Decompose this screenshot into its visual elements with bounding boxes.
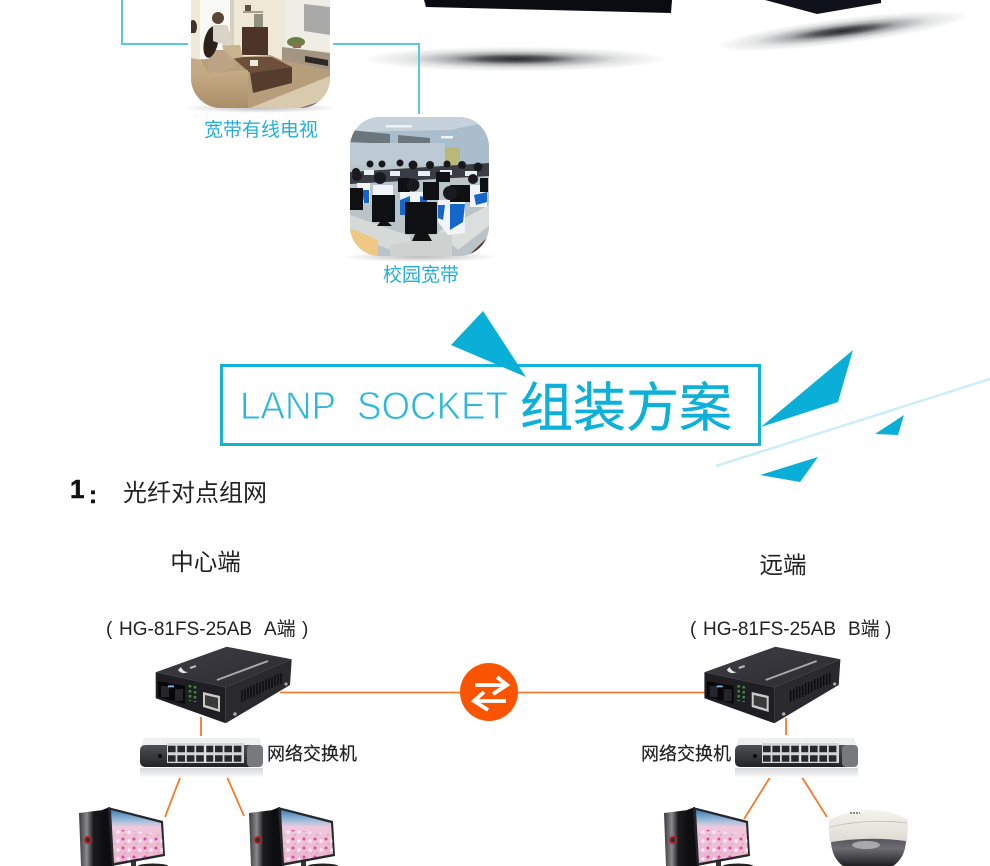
icon: exchange arrows (460, 663, 518, 721)
decorative streak (716, 379, 990, 466)
orange connection lines (165, 692, 827, 819)
section number (70, 474, 97, 509)
triangle right small (875, 415, 904, 435)
computer 1 (79, 807, 168, 866)
model label B: ) (885, 619, 891, 640)
banner: frame and heading (222, 366, 760, 444)
section heading: 光纤对点组网 (123, 480, 267, 507)
banner text: assembly solution: 组装方案 (520, 379, 732, 438)
banner text: LANP SOCKET (240, 385, 508, 428)
switch right (735, 738, 858, 778)
triangle right large (761, 350, 853, 427)
device: transceiver B (704, 647, 840, 723)
model label A: HG-81FS-25AB (119, 619, 252, 640)
photo: broadband TV living room (189, 0, 330, 108)
section number: : (89, 482, 97, 509)
label: central end: 中心端 (170, 549, 241, 575)
device: transceiver A (156, 647, 292, 723)
model label B: HG-81FS-25AB (703, 619, 836, 640)
model label B: B端 (848, 618, 880, 640)
photo: campus broadband classroom (350, 117, 489, 256)
model label A: ( (106, 619, 113, 640)
device base left (424, 0, 672, 13)
banner text: LANP SOCKET: LANP (240, 385, 336, 428)
connector lines: top (122, 0, 419, 114)
computer 3 (664, 807, 753, 866)
triangle top (451, 311, 526, 377)
computer 2 (249, 807, 338, 866)
photo shadow: campus (342, 252, 498, 262)
product shadow left (363, 46, 667, 72)
model label B: ( (690, 619, 697, 640)
model label A: A端 (264, 618, 296, 640)
label: switch right: 网络交换机 (641, 744, 731, 764)
section number: 1 (70, 474, 84, 504)
label: broadband TV: 宽带有线电视 (204, 119, 318, 141)
banner text: LANP SOCKET: SOCKET (357, 385, 508, 428)
model label A: ) (302, 619, 308, 640)
dome camera (829, 810, 908, 866)
photo shadow: living room (183, 103, 339, 113)
triangle bottom (760, 457, 818, 482)
product shadow right (714, 2, 972, 60)
label: switch left: 网络交换机 (267, 744, 357, 764)
device base right (765, 0, 881, 14)
switch left (140, 738, 263, 778)
label: campus broadband: 校园宽带 (383, 264, 459, 286)
label: remote end: 远端 (760, 552, 806, 578)
